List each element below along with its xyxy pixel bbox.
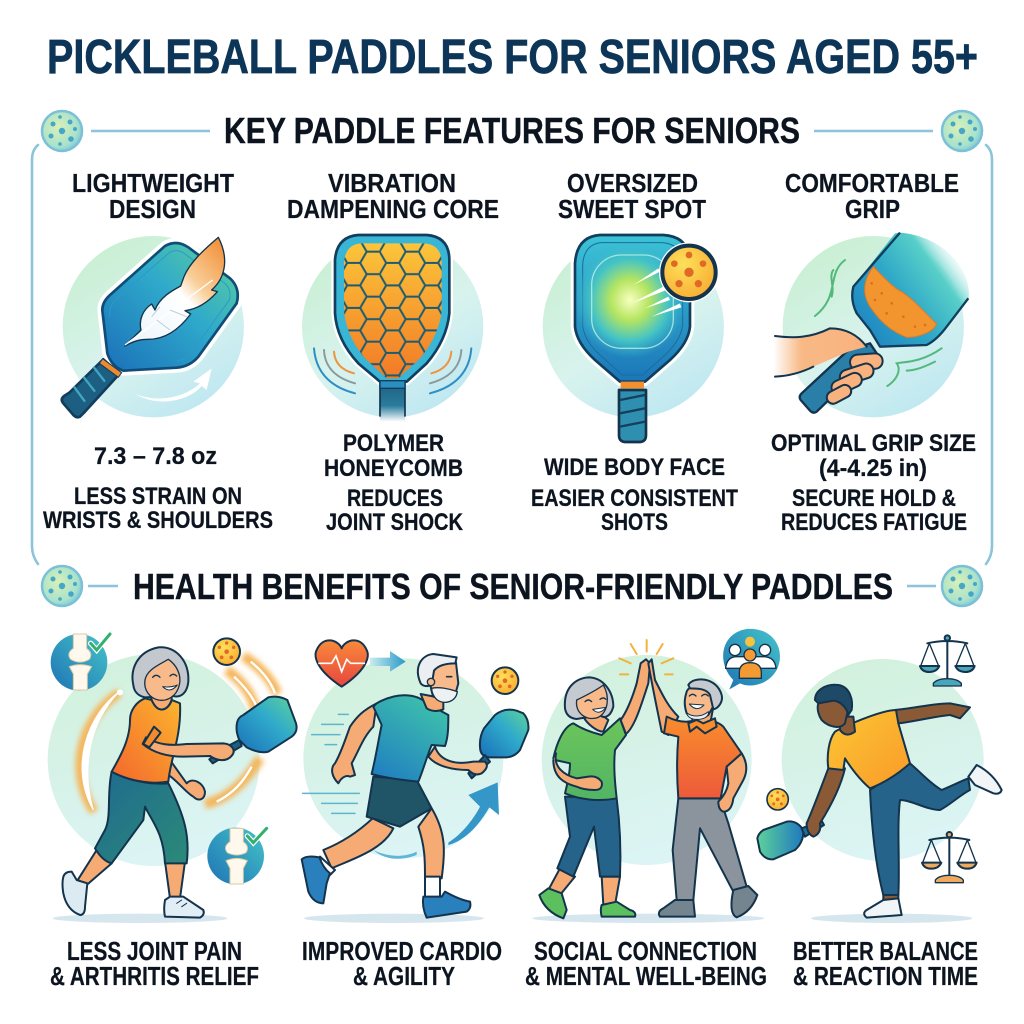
man xyxy=(673,798,747,900)
panel frame xyxy=(32,145,992,564)
feature: lightweight design: 7.3 – 7.8 oz xyxy=(94,443,217,470)
feature: lightweight design: LESS STRAIN ON xyxy=(74,483,242,510)
benefit: social connection: & MENTAL WELL-BEING xyxy=(525,961,767,991)
icon: honeycomb paddle xyxy=(302,235,483,422)
feature: oversized sweet spot xyxy=(531,168,738,536)
feature: lightweight design: WRISTS & SHOULDERS xyxy=(43,507,273,534)
benefit: improved cardio xyxy=(302,640,528,991)
feature: oversized sweet spot: SWEET SPOT xyxy=(558,194,706,224)
icon: teal scale xyxy=(920,635,975,686)
icon: community speech bubble xyxy=(723,629,780,689)
feature: vibration dampening core: REDUCES xyxy=(347,485,443,512)
icon: hand holding paddle xyxy=(773,233,969,417)
feature: vibration dampening core xyxy=(287,168,499,536)
icon: healthy joint top xyxy=(51,634,110,691)
benefit: social connection: SOCIAL CONNECTION xyxy=(534,936,757,966)
feature: comfortable grip: GRIP xyxy=(845,194,900,224)
feature: comfortable grip: (4-4.25 in) xyxy=(819,455,927,482)
feature: vibration dampening core: VIBRATION xyxy=(328,168,456,198)
feature: vibration dampening core: DAMPENING CORE xyxy=(287,194,499,224)
panel: key paddle features xyxy=(32,110,992,564)
woman xyxy=(548,868,575,895)
icon: paddle with glowing sweet spot and ball xyxy=(543,235,724,442)
feature: lightweight design xyxy=(43,168,273,534)
benefit: social connection xyxy=(525,629,780,991)
feature: lightweight design: DESIGN xyxy=(109,194,196,224)
illustration: woman playing with joint icons xyxy=(48,634,297,923)
feature: comfortable grip: OPTIMAL GRIP SIZE xyxy=(771,430,976,457)
feature: oversized sweet spot: OVERSIZED xyxy=(567,168,698,198)
feature: vibration dampening core: POLYMER xyxy=(343,430,444,457)
illustration: two seniors high five xyxy=(532,629,780,923)
benefit: better balance xyxy=(757,635,1002,991)
section heading: health benefits: HEALTH BENEFITS OF SENIOR-FRIENDLY PADDLES xyxy=(133,566,893,607)
illustration: man running with heart icon xyxy=(302,640,528,923)
benefit: improved cardio: & AGILITY xyxy=(353,961,455,991)
benefit: less joint pain xyxy=(48,634,297,991)
feature: oversized sweet spot: WIDE BODY FACE xyxy=(544,454,725,481)
benefit: less joint pain: LESS JOINT PAIN xyxy=(67,936,242,966)
feature: oversized sweet spot: SHOTS xyxy=(601,509,668,536)
feature: oversized sweet spot: EASIER CONSISTENT xyxy=(531,485,738,512)
icon: paddle with feather xyxy=(62,236,244,417)
icon: healthy joint bottom xyxy=(207,828,267,884)
benefit: better balance: & REACTION TIME xyxy=(793,961,978,991)
illustration: man balancing with paddle and scales xyxy=(757,635,1002,923)
benefit: improved cardio: IMPROVED CARDIO xyxy=(302,936,502,966)
section heading: key features: KEY PADDLE FEATURES FOR SENIORS xyxy=(224,110,800,151)
icon: orange scale xyxy=(922,832,977,883)
icon: heart with pulse xyxy=(316,640,368,687)
feature: vibration dampening core: JOINT SHOCK xyxy=(326,509,464,536)
benefit: less joint pain: & ARTHRITIS RELIEF xyxy=(50,961,259,991)
feature: comfortable grip: REDUCES FATIGUE xyxy=(781,509,967,536)
feature: lightweight design: LIGHTWEIGHT xyxy=(72,168,234,198)
panel: health benefits xyxy=(42,566,1002,991)
feature: comfortable grip: COMFORTABLE xyxy=(785,168,959,198)
feature: vibration dampening core: HONEYCOMB xyxy=(324,455,463,482)
feature: comfortable grip xyxy=(771,168,976,536)
feature: comfortable grip: SECURE HOLD & xyxy=(792,485,956,512)
